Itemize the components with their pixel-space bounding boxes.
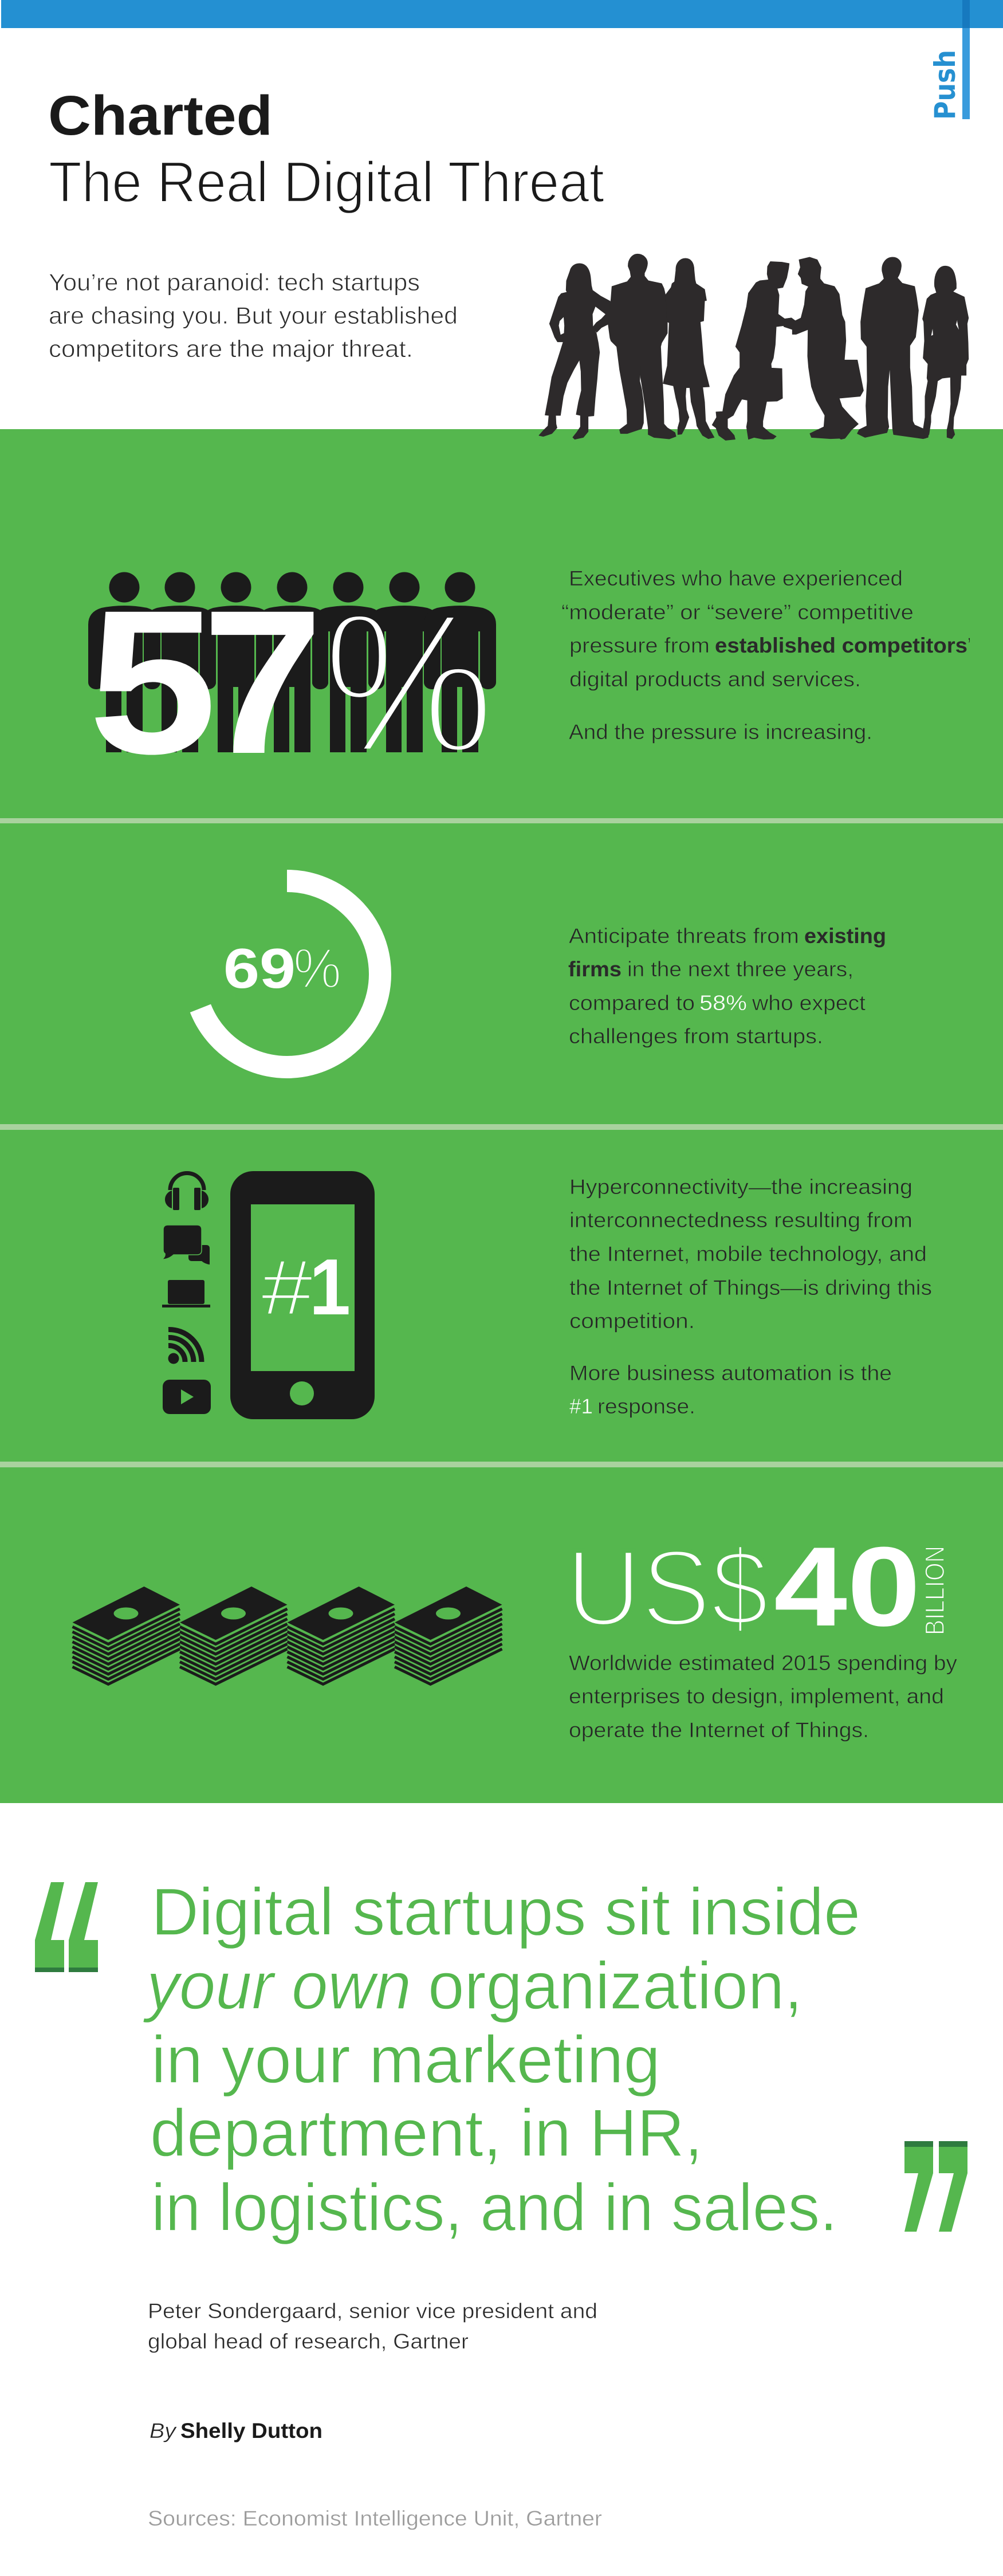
- stat: 57: 7: [202, 567, 323, 796]
- text: executives: [561, 566, 971, 744]
- panel: 40 billion: [72, 1523, 957, 1742]
- icon: headphones: [165, 1173, 209, 1210]
- quote attribution: Peter Sondergaard, senior vice president and: [148, 2299, 597, 2323]
- icon: smartphone: [230, 1171, 375, 1419]
- push tab line: [962, 0, 970, 119]
- title: [48, 84, 604, 214]
- quote text: in your marketing: [151, 2022, 660, 2097]
- quote text: your own: [143, 1948, 411, 2023]
- text: hyperconnectivity: #1: [569, 1394, 593, 1418]
- text: executives: ’: [967, 633, 971, 657]
- quote text: [143, 1874, 860, 2245]
- stat: 69 percent: 69: [223, 937, 296, 1000]
- text: worldwide spending: [569, 1651, 957, 1742]
- push label: Push: [929, 50, 962, 120]
- intro text: [49, 269, 458, 362]
- text: worldwide spending: enterprises to design, implement, and: [569, 1684, 944, 1708]
- text: hyperconnectivity: Hyperconnectivity—the increasing: [569, 1175, 912, 1199]
- text: worldwide spending: operate the Internet of Things.: [569, 1718, 869, 1742]
- intro text: are chasing you. But your established: [49, 302, 458, 329]
- byline: By: [150, 2419, 178, 2443]
- stat: US$: US$: [566, 1527, 769, 1649]
- text: executives: “moderate” or “severe” competitive: [561, 600, 914, 624]
- quote text: Digital startups sit inside: [151, 1874, 860, 1949]
- stat: #1: 1: [309, 1243, 351, 1332]
- text: anticipate threats: Anticipate threats from: [569, 924, 799, 948]
- text: executives: pressure from: [569, 633, 710, 657]
- stat: #1: #: [261, 1244, 313, 1332]
- stat: 57: 5: [88, 567, 217, 796]
- stat: 69 percent: %: [293, 937, 341, 1000]
- text: executives: Executives who have experienced: [569, 566, 903, 590]
- stat: 40: 40: [774, 1523, 921, 1650]
- text: anticipate threats: compared to: [569, 991, 695, 1015]
- text: hyperconnectivity: response.: [597, 1394, 695, 1418]
- icon: laptop: [162, 1280, 210, 1307]
- quote text: department, in HR,: [150, 2095, 703, 2170]
- stat: 69 percent: [223, 937, 341, 1000]
- top blue bar: [1, 0, 1003, 28]
- icon: stacks of money: [72, 1587, 502, 1684]
- quote attribution: [148, 2299, 597, 2353]
- intro text: You’re not paranoid: tech startups: [49, 269, 420, 296]
- silhouettes: left group: [539, 254, 714, 439]
- text: hyperconnectivity: the Internet of Things—is driving this: [569, 1275, 932, 1299]
- title: charted: Charted: [48, 84, 273, 147]
- icon: closing quote mark: [904, 2141, 967, 2232]
- quote text: in logistics, and in sales.: [151, 2170, 837, 2245]
- text: anticipate threats: existing: [804, 924, 886, 948]
- stat: 57: [88, 567, 323, 796]
- text: anticipate threats: [568, 924, 886, 1048]
- text: anticipate threats: who expect: [752, 991, 866, 1015]
- sources: Sources: Economist Intelligence Unit, Gartner: [148, 2507, 602, 2530]
- byline: Shelly Dutton: [180, 2419, 322, 2443]
- text: hyperconnectivity: the Internet, mobile technology, and: [569, 1242, 927, 1266]
- text: hyperconnectivity: competition.: [569, 1309, 695, 1333]
- title: the real digital threat: The Real Digital Threat: [49, 150, 604, 214]
- text: hyperconnectivity: More business automation is the: [569, 1361, 892, 1385]
- quote attribution: global head of research, Gartner: [148, 2330, 469, 2353]
- separators: [0, 818, 1003, 1467]
- stat: billion: BILLION: [919, 1546, 950, 1635]
- ring chart: 69 percent: [200, 881, 380, 1067]
- text: executives: And the pressure is increasing.: [569, 720, 872, 744]
- icon: silhouettes of business people: [539, 254, 969, 440]
- text: executives: established competitors: [715, 633, 967, 657]
- quote text: organization,: [428, 1948, 803, 2023]
- panel: number one: [162, 1171, 932, 1419]
- icon: chat bubbles: [162, 1225, 210, 1265]
- icon: row of seven people: [88, 572, 496, 752]
- text: anticipate threats: challenges from startups.: [569, 1024, 823, 1048]
- stat: percent sign: %: [322, 571, 495, 795]
- text: hyperconnectivity: [569, 1175, 932, 1418]
- text: anticipate threats: in the next three years,: [627, 957, 853, 981]
- icon: video play: [163, 1380, 211, 1414]
- text: anticipate threats: firms: [568, 957, 622, 981]
- icon: opening quote mark: [35, 1882, 98, 1972]
- panel: 69 percent: [200, 881, 886, 1067]
- silhouettes: right group: [712, 257, 969, 440]
- panel: 57 percent: [88, 570, 970, 755]
- green panel background: [0, 429, 1003, 1803]
- icon: rss feed: [168, 1329, 202, 1364]
- text: anticipate threats: 58%: [699, 991, 747, 1015]
- stat: #1: [261, 1243, 351, 1332]
- text: executives: digital products and services.: [569, 667, 861, 691]
- intro text: competitors are the major threat.: [49, 335, 413, 362]
- text: hyperconnectivity: interconnectedness resulting from: [569, 1208, 912, 1232]
- text: worldwide spending: Worldwide estimated 2015 spending by: [569, 1651, 957, 1675]
